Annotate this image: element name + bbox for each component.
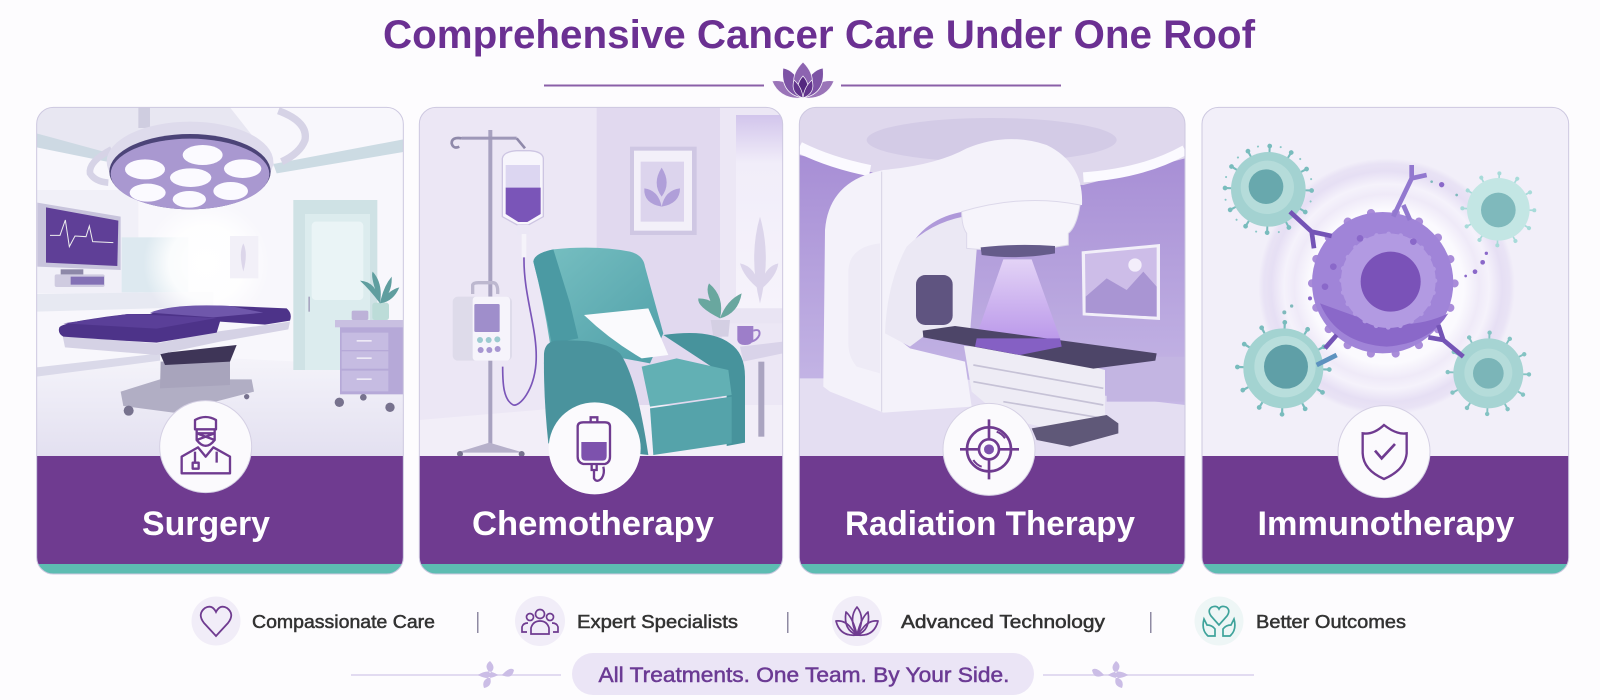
drawer cart with plant (335, 272, 403, 412)
teal strip (1202, 564, 1569, 574)
side table, plant and mug (698, 283, 783, 437)
label: Chemotherapy: Chemotherapy (472, 505, 714, 543)
benefit: better outcomes (1194, 596, 1406, 646)
tagline right sprig (1043, 661, 1254, 688)
panel: surgery (37, 107, 403, 574)
panel: immunotherapy (1202, 107, 1569, 574)
wall picture (630, 147, 697, 235)
benefit: expert specialists: Expert Specialists (577, 612, 738, 632)
tagline left sprig (351, 661, 561, 688)
illustration: linear accelerator room (799, 107, 1185, 461)
wall picture (1082, 244, 1160, 320)
illustration: immune cells attacking cancer cell (1202, 107, 1569, 461)
benefit: advanced technology: Advanced Technology (901, 612, 1105, 632)
cancer cell (1312, 212, 1455, 355)
icon: lotus (772, 62, 834, 98)
door (293, 200, 377, 370)
title: Comprehensive Cancer Care Under One Roof (383, 13, 1256, 57)
teal strip (799, 564, 1185, 574)
icon: people (515, 596, 565, 646)
label band (1202, 456, 1569, 574)
icon: target (943, 403, 1035, 495)
panel: chemotherapy (419, 107, 783, 574)
card border (799, 107, 1185, 574)
signal dots (1282, 180, 1488, 314)
card border (37, 107, 403, 574)
surgical lamp (90, 107, 305, 209)
illustration: operating room (37, 107, 403, 461)
label: Surgery: Surgery (142, 505, 270, 543)
illustration: infusion room (419, 107, 783, 461)
icon: shield (1338, 406, 1430, 498)
benefit: compassionate care: Compassionate Care (252, 612, 435, 632)
label band (799, 456, 1185, 574)
card border (419, 107, 783, 574)
teal strip (419, 564, 783, 574)
icon: infusion bag (549, 402, 641, 494)
operating table (59, 305, 291, 416)
benefit: compassionate care (192, 596, 435, 646)
card border (1202, 107, 1569, 574)
IV pole and bag (452, 130, 543, 457)
radiation beam (975, 259, 1061, 340)
teal recliner (533, 248, 745, 455)
separator (1150, 612, 1152, 633)
treatment couch (923, 326, 1157, 447)
benefit: advanced technology (832, 596, 1105, 646)
label band (37, 456, 403, 574)
patient monitor (37, 203, 121, 287)
treatment machine (823, 139, 1082, 413)
immune cell top left (1224, 145, 1312, 233)
icon: surgeon (160, 401, 252, 493)
panel: radiation therapy (799, 107, 1185, 574)
label band (419, 456, 783, 574)
infusion pump (453, 283, 512, 361)
title divider with lotus (544, 62, 1061, 98)
teal strip (37, 564, 403, 574)
tagline pill (572, 653, 1034, 695)
tagline pill: All Treatments. One Team. By Your Side. (598, 664, 1010, 687)
antibodies (1290, 165, 1463, 365)
immune cell bottom right (1448, 333, 1529, 414)
benefit: better outcomes: Better Outcomes (1256, 612, 1406, 632)
icon: heart (192, 596, 240, 646)
label: Radiation Therapy: Radiation Therapy (845, 505, 1135, 543)
immune cell top right (1462, 173, 1534, 245)
icon: hands with heart (1194, 596, 1244, 646)
icon: lotus outline (832, 596, 882, 646)
label: Immunotherapy: Immunotherapy (1258, 505, 1515, 543)
benefit: expert specialists (515, 596, 738, 646)
immune cell bottom left (1237, 322, 1329, 414)
separator (477, 612, 478, 633)
separator (787, 612, 788, 633)
